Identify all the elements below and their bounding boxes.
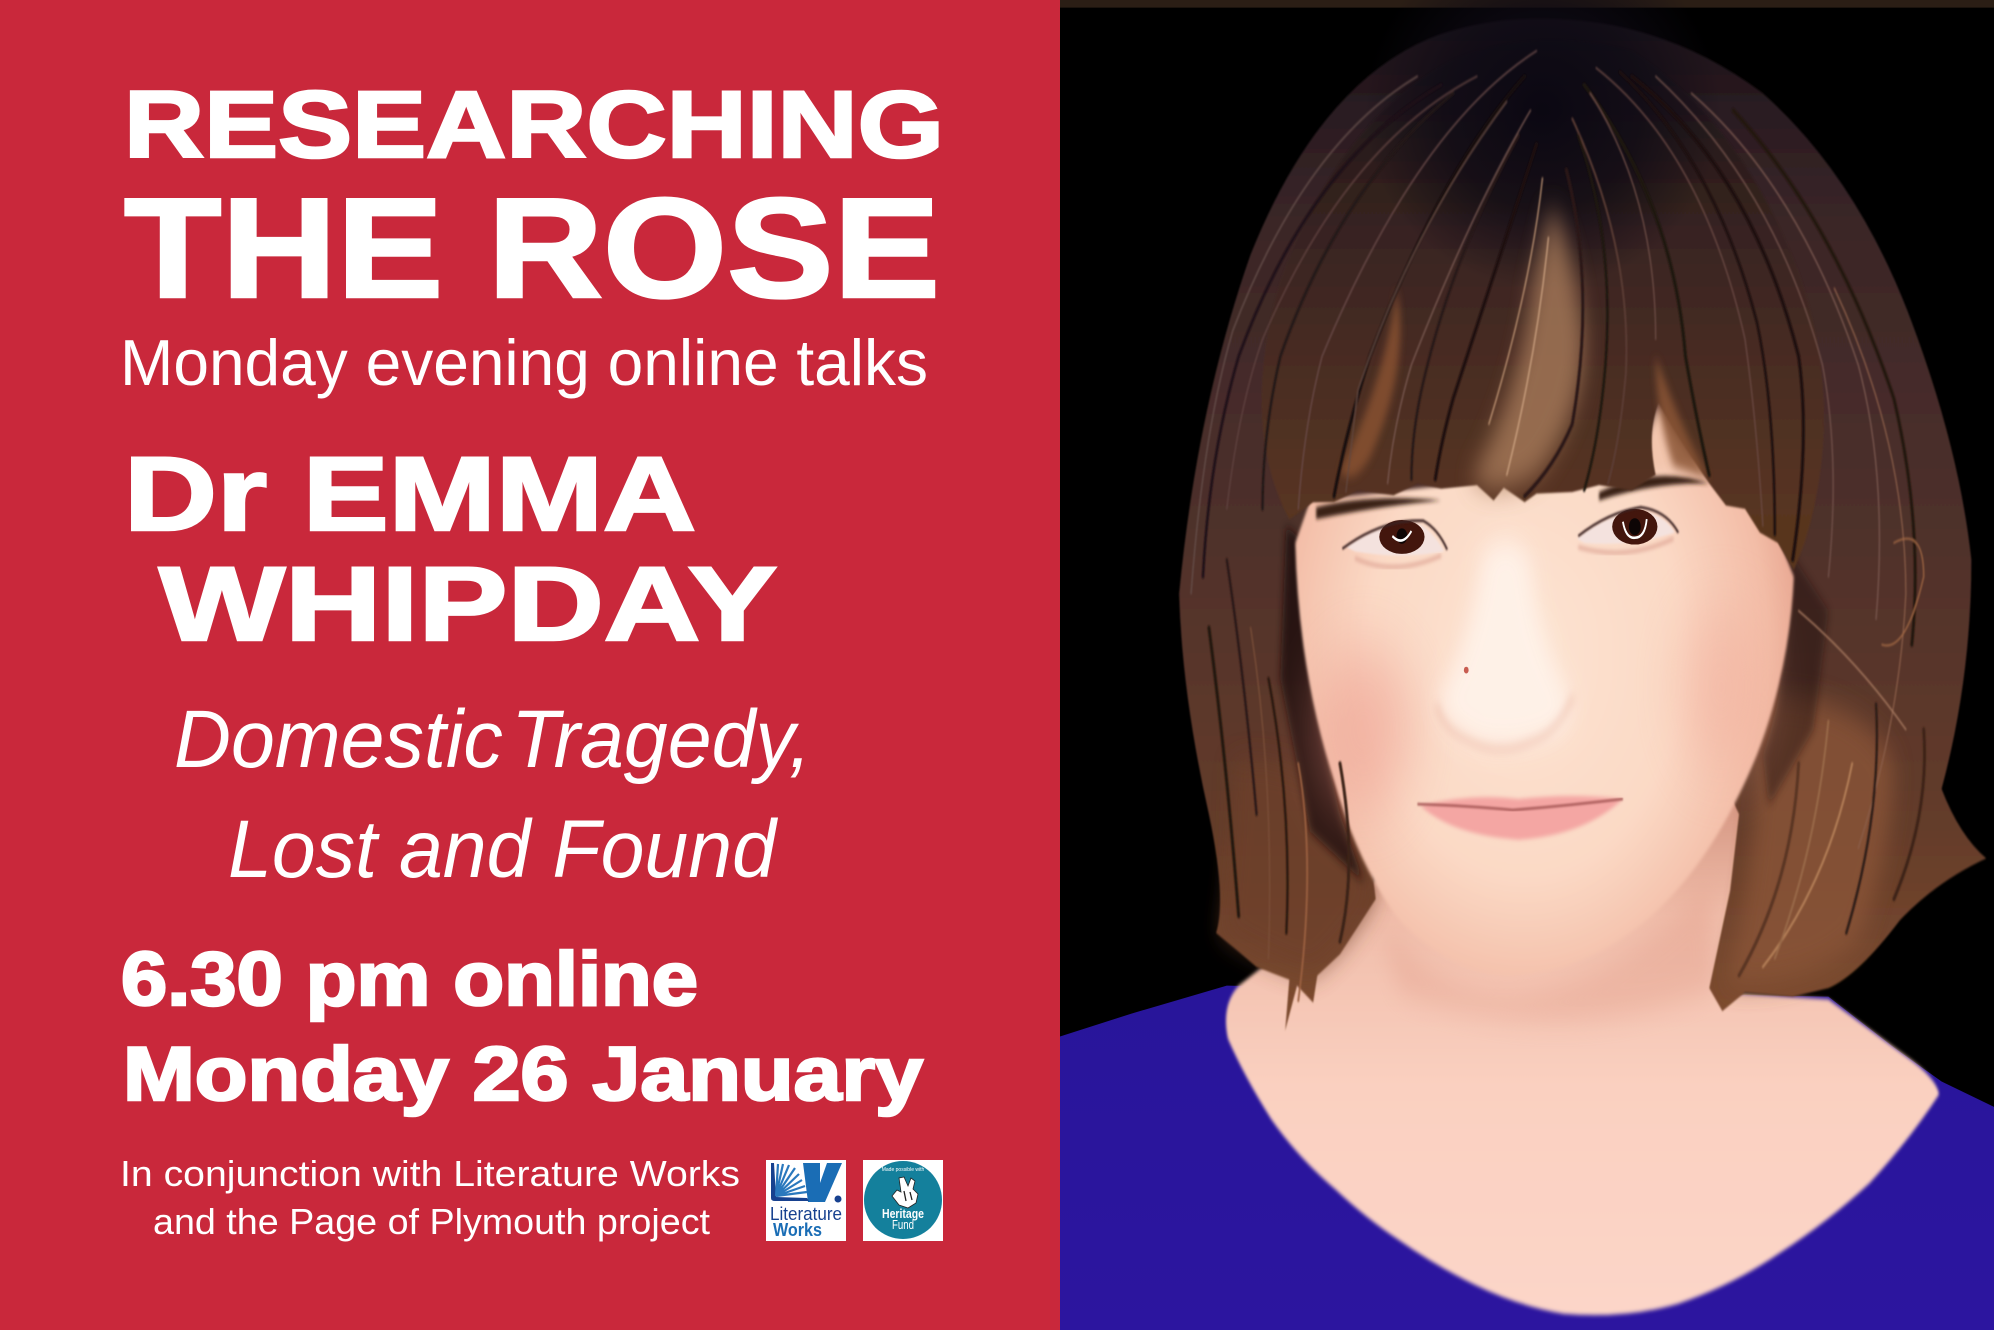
portrait: cheek blush left [1316, 645, 1411, 814]
credit line two: and the Page of Plymouth project [153, 1201, 710, 1242]
talk title: first line: Domestic Tragedy, [174, 694, 811, 785]
portrait: right eyebrow [1599, 476, 1709, 500]
portrait: hair ends warm tint left [1220, 760, 1376, 975]
portrait: blue top [1060, 986, 1994, 1330]
logo: Literature Works: Literature [770, 1204, 842, 1224]
speaker name: second line: WHIPDAY [159, 546, 777, 663]
portrait: cheek blush right [1679, 602, 1763, 772]
portrait: left eye [1342, 520, 1447, 567]
logo: Literature Works: Works [773, 1220, 822, 1240]
logo: Literature Works [766, 1160, 846, 1241]
logo: Heritage Fund [863, 1160, 943, 1241]
portrait: neck and chest [1226, 746, 1939, 1315]
talk title: second line: Lost and Found [228, 804, 778, 895]
logo: Heritage Fund: Heritage [882, 1207, 924, 1221]
subtitle: Monday evening online talks [120, 326, 928, 399]
portrait: nose underside [1436, 696, 1573, 749]
fringe: warm left streak [1340, 288, 1400, 477]
fringe: light parting [1471, 204, 1584, 489]
logo: Heritage Fund: Made possible with [882, 1167, 924, 1173]
fringe: dark crown [1364, 0, 1721, 288]
portrait: nose highlight [1438, 540, 1570, 746]
date: Monday 26 January [123, 1032, 923, 1117]
portrait: fringe [1191, 0, 1925, 1001]
portrait: dark hair by left cheek [1280, 526, 1364, 882]
time: 6.30 pm online [121, 937, 698, 1022]
portrait: dark hair by right cheek [1763, 551, 1828, 806]
photo: portrait of Dr Emma Whipday [1060, 0, 1994, 1330]
portrait: back hair [1179, 19, 1986, 1031]
portrait: forehead patch [1614, 403, 1708, 482]
portrait: face [1295, 451, 1794, 975]
title: Researching: RESEARCHING [124, 72, 944, 178]
speaker name: first line: Dr EMMA [124, 436, 696, 553]
portrait: hair ends warm tint right [1727, 696, 1894, 984]
fringe: warm right streak [1656, 356, 1709, 479]
portrait: neck shadow [1382, 882, 1715, 1021]
panel: red background [0, 0, 1060, 1330]
fringe: hair strands [1191, 51, 1925, 1001]
logo: Heritage Fund: Fund [892, 1218, 914, 1232]
portrait: left eyebrow [1316, 498, 1441, 519]
credit line one: In conjunction with Literature Works [120, 1153, 740, 1194]
title: The Rose: THE ROSE [124, 169, 940, 328]
portrait: right eye [1577, 507, 1678, 553]
portrait: lips [1417, 796, 1623, 840]
